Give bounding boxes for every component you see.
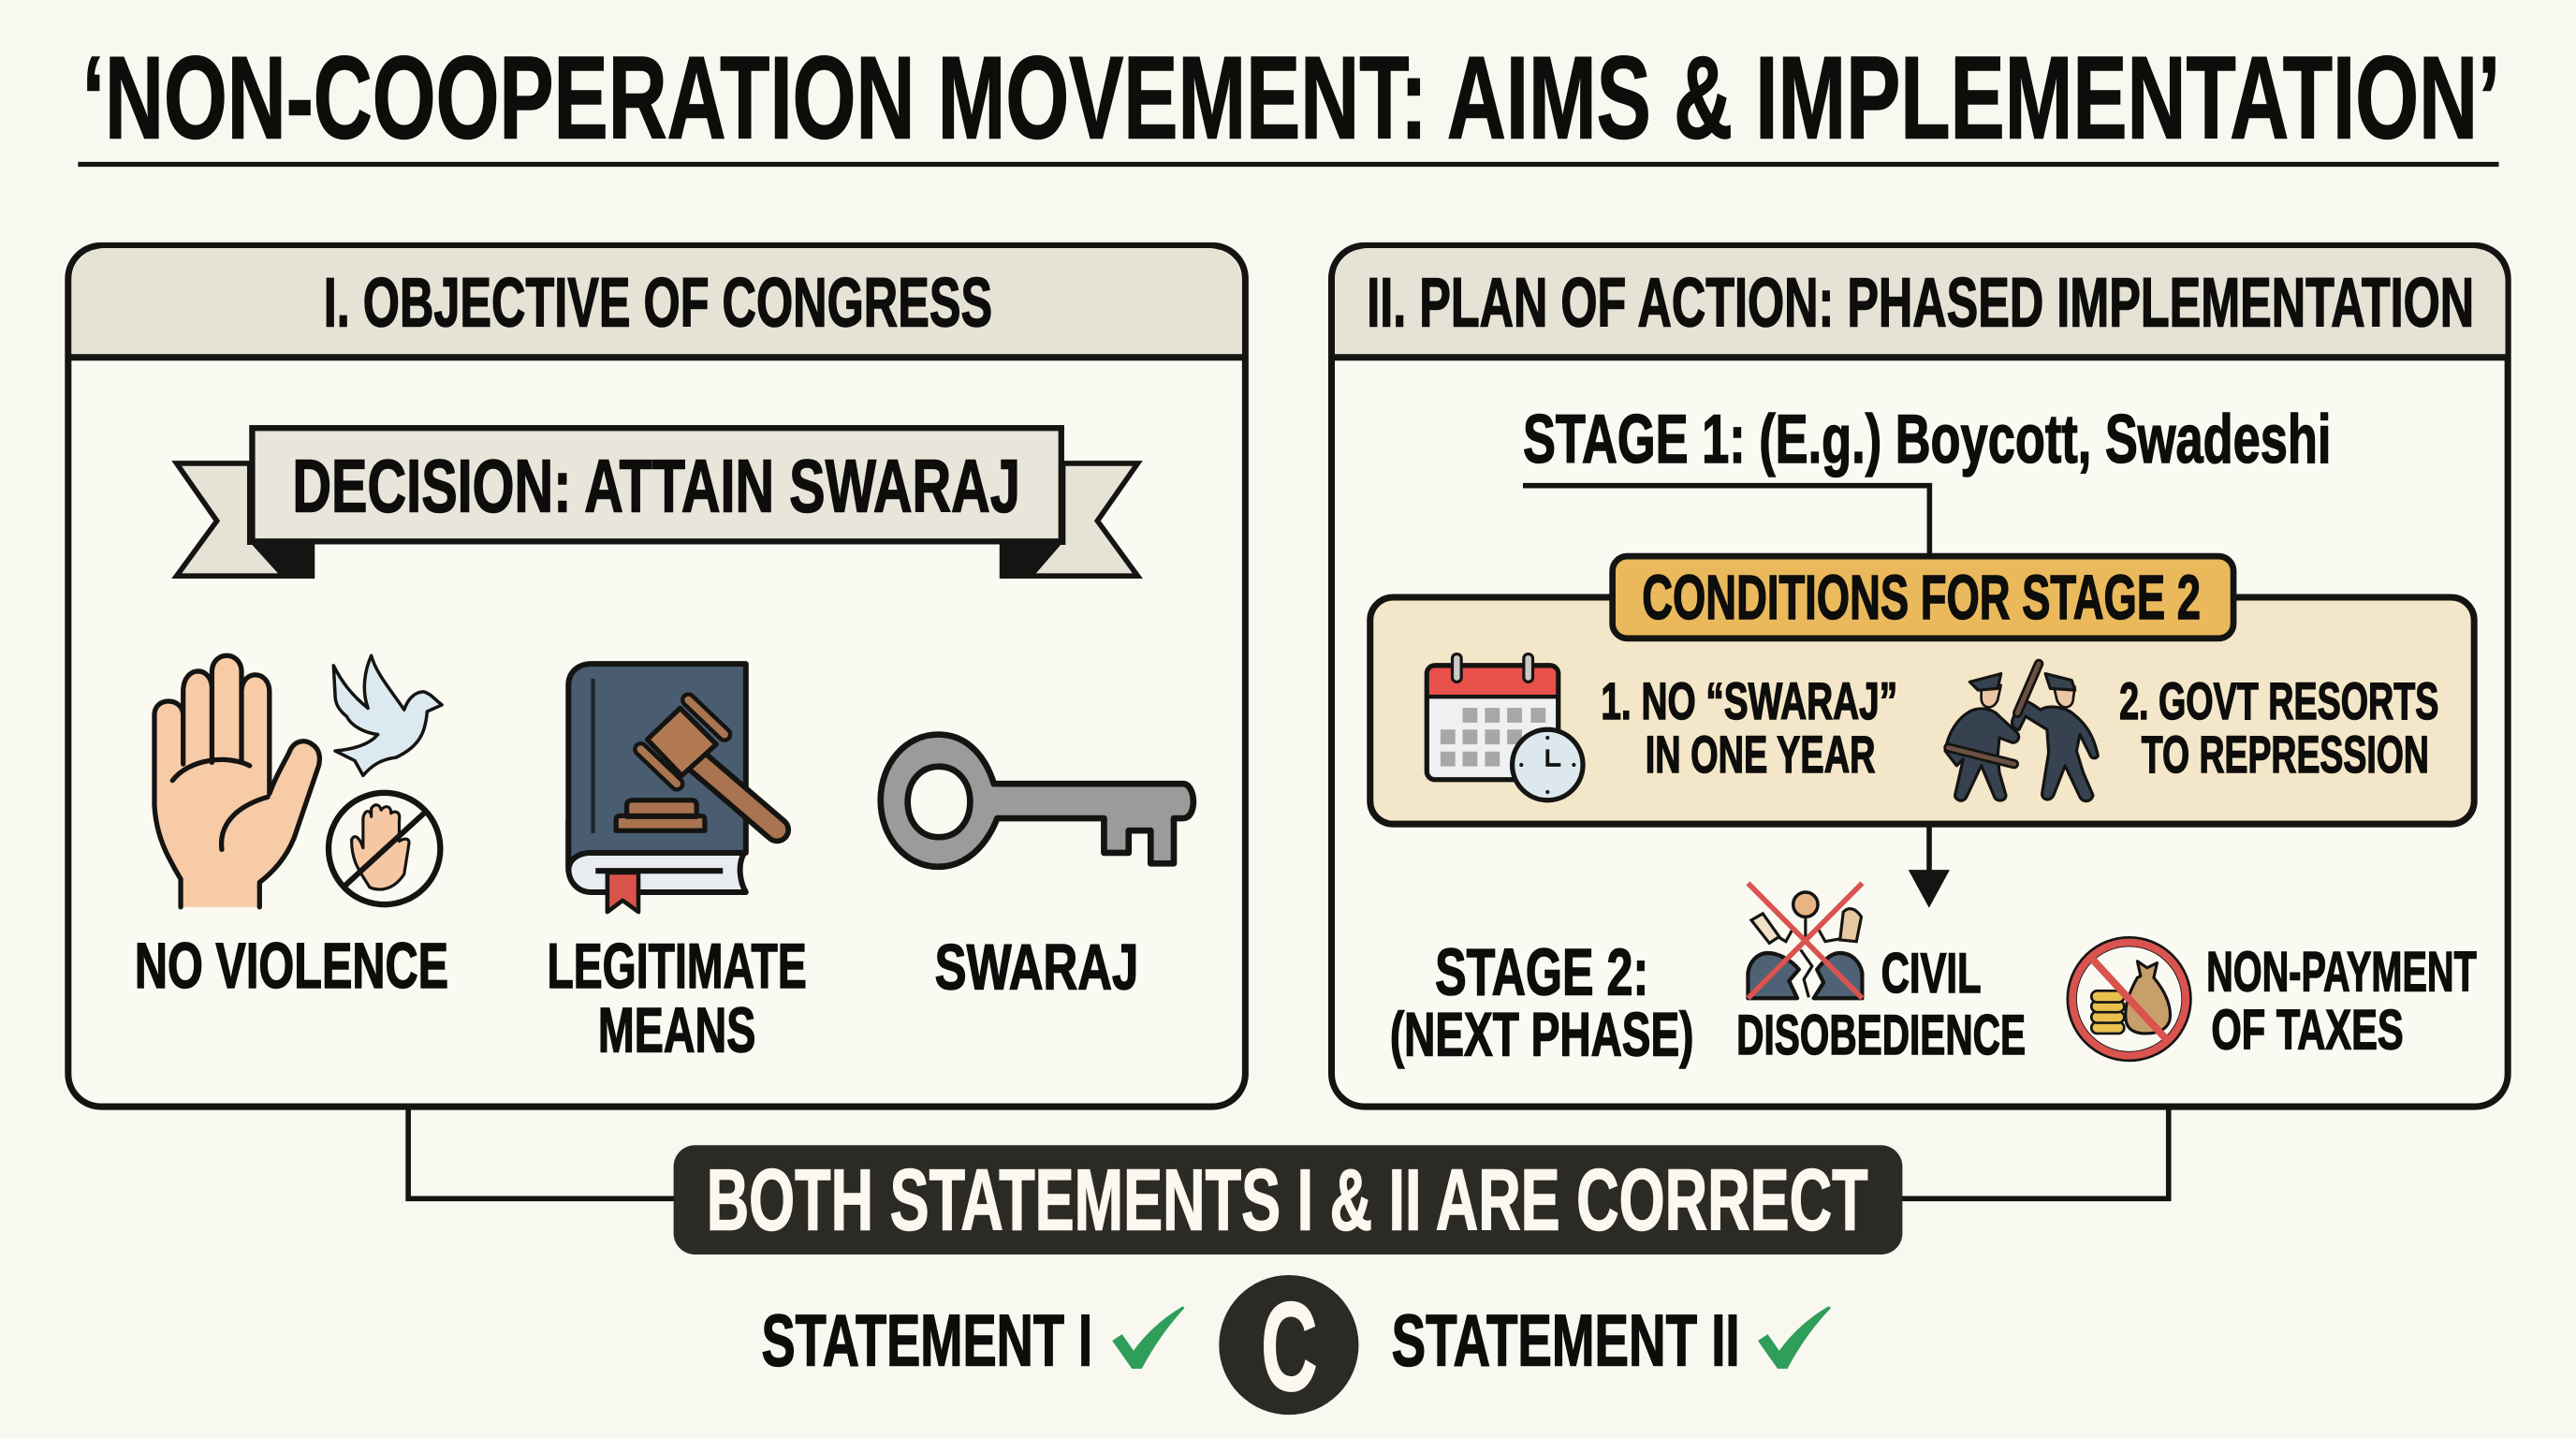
icon: open hand bbox=[154, 655, 319, 907]
icon: no tax payment bbox=[2071, 942, 2187, 1057]
answer bar: BOTH STATEMENTS I & II ARE CORRECT bbox=[707, 1152, 1868, 1249]
label: non-payment of taxes bbox=[2206, 939, 2477, 1062]
panel: plan of action bbox=[1332, 245, 2508, 1107]
condition 1 text: 1. NO “SWARAJ” bbox=[1601, 672, 1897, 730]
label: legitimate means: MEANS bbox=[598, 995, 755, 1065]
connector: panels to answer bbox=[408, 1108, 2169, 1198]
connector: stage 1 to conditions bbox=[1523, 486, 1929, 559]
icon: dove bbox=[333, 655, 442, 775]
condition 2 text: 2. GOVT RESORTS bbox=[2119, 672, 2438, 730]
stage 2 label: (NEXT PHASE) bbox=[1390, 1000, 1694, 1069]
stage 2 label: STAGE 2: bbox=[1435, 935, 1648, 1009]
statement I: STATEMENT I bbox=[761, 1299, 1092, 1381]
label: legitimate means: LEGITIMATE bbox=[547, 932, 807, 1002]
icon: no fighting hand bbox=[329, 793, 440, 904]
label: civil disobedience: CIVIL bbox=[1881, 941, 1982, 1005]
condition 1 text: IN ONE YEAR bbox=[1646, 726, 1875, 784]
badge: conditions bbox=[1613, 556, 2233, 638]
panel heading: I. OBJECTIVE OF CONGRESS bbox=[324, 262, 992, 341]
banner: decision bbox=[177, 428, 1137, 579]
condition 2 text bbox=[2119, 672, 2438, 784]
label: non-payment of taxes: OF TAXES bbox=[2211, 998, 2404, 1062]
label: civil disobedience bbox=[1736, 941, 2026, 1066]
answer bar bbox=[674, 1145, 1902, 1255]
icon: check mark I bbox=[1112, 1306, 1184, 1369]
label: civil disobedience: DISOBEDIENCE bbox=[1736, 1003, 2026, 1066]
condition 2 text: TO REPRESSION bbox=[2142, 726, 2429, 784]
statement II: STATEMENT II bbox=[1392, 1299, 1740, 1381]
condition 1 text bbox=[1601, 672, 1897, 784]
panel: objective of Congress bbox=[68, 245, 1245, 1107]
label: no violence: NO VIOLENCE bbox=[135, 930, 448, 1002]
answer badge C: C bbox=[1261, 1276, 1318, 1417]
icon: key bbox=[881, 735, 1193, 867]
icon: civil disobedience crossed out bbox=[1748, 883, 1862, 998]
badge: conditions: CONDITIONS FOR STAGE 2 bbox=[1642, 564, 2201, 633]
answer badge C bbox=[1219, 1275, 1358, 1417]
icon: police with batons bbox=[1945, 664, 2098, 801]
label: legitimate means bbox=[547, 932, 807, 1065]
icon: check mark II bbox=[1758, 1306, 1831, 1369]
label: swaraj: SWARAJ bbox=[935, 932, 1138, 1004]
arrow: conditions to stage 2 bbox=[1909, 825, 1950, 908]
banner: decision: DECISION: ATTAIN SWARAJ bbox=[292, 445, 1020, 528]
box: conditions for stage 2 bbox=[1370, 556, 2474, 824]
stage 2 label bbox=[1390, 935, 1694, 1069]
icon: law book and gavel bbox=[568, 664, 777, 912]
icon: calendar and clock bbox=[1427, 654, 1583, 800]
